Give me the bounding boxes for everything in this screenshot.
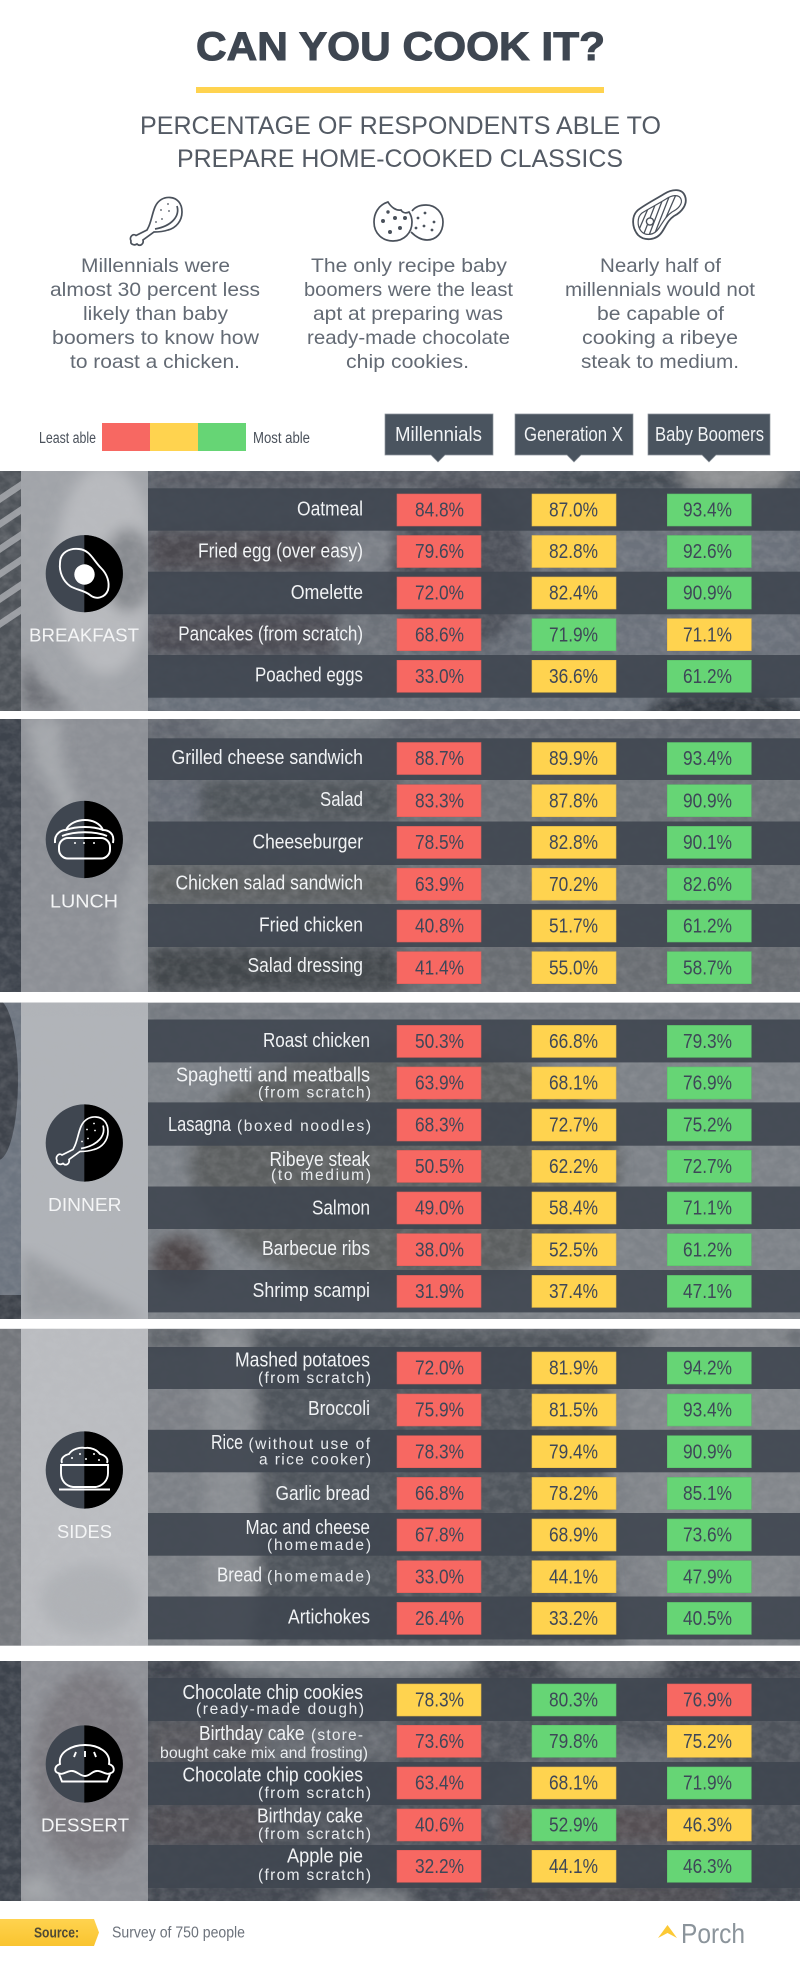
row: oatmeal: 93.4% [683,499,732,522]
row: grilled cheese sandwich: 93.4% [683,747,732,770]
source text: Survey of 750 people [112,1925,245,1942]
row: salad [320,785,751,817]
row: barbecue ribs: Barbecue ribs [262,1237,370,1260]
text block: ribeye fact: be capable of [597,303,725,325]
row: chicken salad sandwich [176,868,751,900]
icon: sandwich [46,801,123,878]
row: chicken salad sandwich: 82.6% [683,873,732,896]
row: grilled cheese sandwich: Grilled cheese sandwich [172,746,363,769]
row: mac and cheese: 67.8% [415,1524,464,1547]
row: rice: a rice cooker) [259,1451,371,1468]
row: fried egg: 79.6% [415,540,464,563]
text block: baby boomers fact [304,255,514,373]
row: salad dressing [248,952,751,984]
row: spaghetti and meatballs: 76.9% [683,1072,732,1095]
row: rice: 78.3% [415,1440,464,1463]
row: chicken salad sandwich: Chicken salad sandwich [176,871,363,894]
row: salad dressing: 58.7% [683,956,732,979]
row: mashed potatoes: (from scratch) [258,1370,371,1387]
row: fried chicken: 40.8% [415,915,464,938]
heading: dessert: DESSERT [41,1815,129,1836]
row: ribeye steak: 62.2% [549,1155,598,1178]
row: mashed potatoes [235,1349,751,1387]
row: garlic bread: Garlic bread [276,1482,370,1505]
row: spaghetti and meatballs: 68.1% [549,1072,598,1095]
row: fried egg: 92.6% [683,540,732,563]
row: lasagna: 75.2% [683,1114,732,1137]
row: bread: (homemade) [267,1568,371,1585]
row: omelette: Omelette [291,581,363,604]
logo: Porch: Porch [681,1918,745,1949]
panel: breakfast [0,471,800,711]
row: bread [217,1561,751,1593]
row: fried egg [198,536,751,568]
row: apple pie: 44.1% [549,1855,598,1878]
source tag: Source: [34,1925,79,1942]
row: chicken salad sandwich: 63.9% [415,873,464,896]
row: chocolate chip cookies from scratch: 63.4% [415,1772,464,1795]
row: pancakes: 71.1% [683,623,732,646]
column header: Baby Boomers: Baby Boomers [655,423,764,446]
text block: millennials fact: almost 30 percent less [50,279,260,301]
text block: baby boomers fact: boomers were the least [304,279,514,301]
row: salad dressing: Salad dressing [248,954,363,977]
row: birthday cake store-bought: 75.2% [683,1730,732,1753]
row: omelette: 82.4% [549,582,598,605]
row: omelette [291,577,751,609]
row: chocolate chip cookies ready-made: (ready-made dough) [196,1701,364,1718]
row: barbecue ribs: 38.0% [415,1238,464,1261]
row: oatmeal [297,494,751,526]
row: mashed potatoes: 94.2% [683,1357,732,1380]
row: spaghetti and meatballs [176,1063,751,1101]
row: oatmeal: Oatmeal [297,498,363,521]
legend [39,423,310,451]
row: shrimp scampi: 31.9% [415,1280,464,1303]
row: salad: 87.8% [549,789,598,812]
row: ribeye steak: (to medium) [271,1167,371,1184]
row: fried chicken: 61.2% [683,915,732,938]
row: salad dressing: 55.0% [549,956,598,979]
row: roast chicken: Roast chicken [263,1029,370,1052]
icon: cookies [374,202,443,241]
row: apple pie [258,1845,751,1884]
row: apple pie: 46.3% [683,1855,732,1878]
row: chocolate chip cookies ready-made [182,1681,751,1718]
row: chocolate chip cookies ready-made: 76.9% [683,1689,732,1712]
row: chocolate chip cookies ready-made: Chocolate chip cookies [182,1681,363,1704]
row: artichokes: Artichokes [288,1605,370,1628]
row: shrimp scampi [252,1275,751,1307]
row: cheeseburger: 82.8% [549,831,598,854]
column header: Generation X [515,414,633,462]
row: salad: 83.3% [415,789,464,812]
row: bread: 47.9% [683,1565,732,1588]
row: poached eggs: 36.6% [549,665,598,688]
column header: Baby Boomers [648,414,770,462]
row: poached eggs [255,660,751,692]
row: mashed potatoes: 81.9% [549,1357,598,1380]
row: lasagna: 72.7% [549,1114,598,1137]
row: birthday cake store-bought: Birthday cake [199,1722,304,1745]
row: broccoli: 93.4% [683,1399,732,1422]
row: birthday cake store-bought: (store- [311,1727,363,1744]
row: chocolate chip cookies from scratch: (from scratch) [258,1785,371,1802]
heading: lunch: LUNCH [50,891,118,912]
row: birthday cake from scratch: 46.3% [683,1814,732,1837]
row: ribeye steak: 72.7% [683,1155,732,1178]
text block: millennials fact [50,255,260,373]
row: broccoli: 81.5% [549,1399,598,1422]
row: spaghetti and meatballs: 63.9% [415,1072,464,1095]
row: fried egg: Fried egg (over easy) [198,539,363,562]
row: rice: Rice [211,1431,243,1454]
row: chicken salad sandwich: 70.2% [549,873,598,896]
row: lasagna: (boxed noodles) [237,1118,371,1135]
row: artichokes: 33.2% [549,1607,598,1630]
row: birthday cake from scratch: (from scratch) [258,1826,371,1843]
row: oatmeal: 87.0% [549,499,598,522]
panel: dinner [0,1000,800,1319]
column header: Generation X: Generation X [524,423,623,446]
text block: ribeye fact: cooking a ribeye [582,327,738,349]
row: roast chicken: 79.3% [683,1030,732,1053]
row: spaghetti and meatballs: (from scratch) [258,1084,371,1101]
row: artichokes [288,1602,751,1634]
row: ribeye steak: Ribeye steak [270,1148,371,1171]
row: salmon: 49.0% [415,1197,464,1220]
row: omelette: 90.9% [683,582,732,605]
icon: rice bowl [46,1431,123,1509]
row: cheeseburger: 78.5% [415,831,464,854]
row: shrimp scampi: 47.1% [683,1280,732,1303]
row: salad: 90.9% [683,789,732,812]
column header: Millennials [385,414,493,462]
row: grilled cheese sandwich: 89.9% [549,747,598,770]
icon: fried egg [46,535,123,612]
row: ribeye steak [270,1148,751,1184]
panel: dessert [0,1661,800,1901]
icon: chicken drumstick [130,197,182,245]
row: spaghetti and meatballs: Spaghetti and meatballs [176,1063,370,1086]
icon: drumstick [46,1104,123,1182]
row: bread: 33.0% [415,1565,464,1588]
text block: millennials fact: likely than baby [83,303,228,325]
row: chocolate chip cookies from scratch: 71.9% [683,1772,732,1795]
row: ribeye steak: 50.5% [415,1155,464,1178]
row: fried chicken: Fried chicken [259,913,363,936]
row: birthday cake from scratch: 40.6% [415,1814,464,1837]
row: salad: Salad [320,788,363,811]
row: pancakes: 71.9% [549,623,598,646]
row: birthday cake from scratch: 52.9% [549,1814,598,1837]
row: barbecue ribs: 61.2% [683,1238,732,1261]
row: artichokes: 26.4% [415,1607,464,1630]
row: fried chicken: 51.7% [549,915,598,938]
row: rice [211,1431,751,1468]
row: rice: 79.4% [549,1440,598,1463]
row: chocolate chip cookies from scratch: Chocolate chip cookies [182,1764,363,1787]
row: chocolate chip cookies ready-made: 78.3% [415,1689,464,1712]
text block: baby boomers fact: ready-made chocolate [307,327,510,349]
panel: lunch [0,713,800,992]
row: birthday cake store-bought: bought cake mix and frosting) [160,1745,368,1762]
row: poached eggs: Poached eggs [255,664,363,687]
row: broccoli: 75.9% [415,1399,464,1422]
row: rice: 90.9% [683,1440,732,1463]
row: salmon: 58.4% [549,1197,598,1220]
row: chocolate chip cookies from scratch [182,1764,751,1802]
row: birthday cake from scratch [257,1805,751,1843]
heading: breakfast: BREAKFAST [29,625,139,646]
subtitle: PREPARE HOME-COOKED CLASSICS [177,145,623,173]
row: birthday cake store-bought [160,1722,751,1762]
row: mashed potatoes: Mashed potatoes [235,1349,370,1372]
row: pancakes [178,619,751,651]
text block: millennials fact: boomers to know how [52,327,260,349]
row: shrimp scampi: Shrimp scampi [252,1279,370,1302]
row: lasagna: Lasagna [168,1113,231,1136]
row: chocolate chip cookies ready-made: 80.3% [549,1689,598,1712]
text block: baby boomers fact: The only recipe baby [311,255,507,277]
row: birthday cake store-bought: 73.6% [415,1730,464,1753]
row: oatmeal: 84.8% [415,499,464,522]
text block: ribeye fact: millennials would not [565,279,756,301]
row: artichokes: 40.5% [683,1607,732,1630]
title: CAN YOU COOK IT? [196,25,605,69]
row: birthday cake from scratch: Birthday cake [257,1805,363,1828]
heading: dinner: DINNER [48,1194,121,1215]
subtitle: PERCENTAGE OF RESPONDENTS ABLE TO [140,112,661,140]
logo: Porch [658,1918,745,1949]
row: shrimp scampi: 37.4% [549,1280,598,1303]
row: roast chicken [263,1025,751,1057]
row: rice: (without use of [248,1436,371,1453]
panel: sides [0,1328,800,1646]
title underline [196,87,604,93]
row: omelette: 72.0% [415,582,464,605]
row: grilled cheese sandwich: 88.7% [415,747,464,770]
row: barbecue ribs [262,1234,751,1266]
row: apple pie: Apple pie [287,1845,363,1868]
row: fried chicken [259,910,751,942]
row: broccoli [308,1394,751,1426]
heading: sides: SIDES [57,1521,112,1542]
row: bread: Bread [217,1563,262,1586]
row: poached eggs: 33.0% [415,665,464,688]
row: mac and cheese: Mac and cheese [246,1516,370,1539]
row: mashed potatoes: 72.0% [415,1357,464,1380]
row: roast chicken: 50.3% [415,1030,464,1053]
text block: ribeye fact: Nearly half of [600,255,722,277]
row: barbecue ribs: 52.5% [549,1238,598,1261]
row: mac and cheese: 68.9% [549,1524,598,1547]
legend: Most able [253,430,310,447]
row: cheeseburger: 90.1% [683,831,732,854]
row: grilled cheese sandwich [172,742,751,774]
row: apple pie: 32.2% [415,1855,464,1878]
row: salmon: Salmon [312,1196,370,1219]
row: lasagna [168,1109,751,1141]
row: garlic bread: 85.1% [683,1482,732,1505]
row: pancakes: Pancakes (from scratch) [178,623,363,646]
text block: baby boomers fact: chip cookies. [346,351,469,373]
text block: millennials fact: to roast a chicken. [70,351,240,373]
row: cheeseburger: Cheeseburger [252,830,363,853]
row: pancakes: 68.6% [415,623,464,646]
row: garlic bread: 66.8% [415,1482,464,1505]
row: mac and cheese [246,1516,751,1554]
row: garlic bread [276,1477,751,1509]
column header: Millennials: Millennials [395,423,482,446]
row: mac and cheese: (homemade) [267,1537,371,1554]
text block: baby boomers fact: apt at preparing was [313,303,503,325]
text block: ribeye fact: steak to medium. [581,351,739,373]
row: salad dressing: 41.4% [415,956,464,979]
icon: ribeye steak [633,190,686,239]
legend: Least able [39,430,96,447]
row: garlic bread: 78.2% [549,1482,598,1505]
row: fried egg: 82.8% [549,540,598,563]
row: birthday cake store-bought: 79.8% [549,1730,598,1753]
row: lasagna: 68.3% [415,1114,464,1137]
row: cheeseburger [252,826,751,858]
text block: millennials fact: Millennials were [81,255,230,277]
row: broccoli: Broccoli [308,1397,370,1420]
row: salmon [312,1192,751,1224]
row: mac and cheese: 73.6% [683,1524,732,1547]
row: apple pie: (from scratch) [258,1867,371,1884]
icon: pie [46,1725,123,1803]
source tag [0,1919,99,1946]
row: poached eggs: 61.2% [683,665,732,688]
subtitle [140,112,661,173]
row: salmon: 71.1% [683,1197,732,1220]
text block: ribeye fact [565,255,756,373]
row: bread: 44.1% [549,1565,598,1588]
row: chocolate chip cookies from scratch: 68.1% [549,1772,598,1795]
row: roast chicken: 66.8% [549,1030,598,1053]
